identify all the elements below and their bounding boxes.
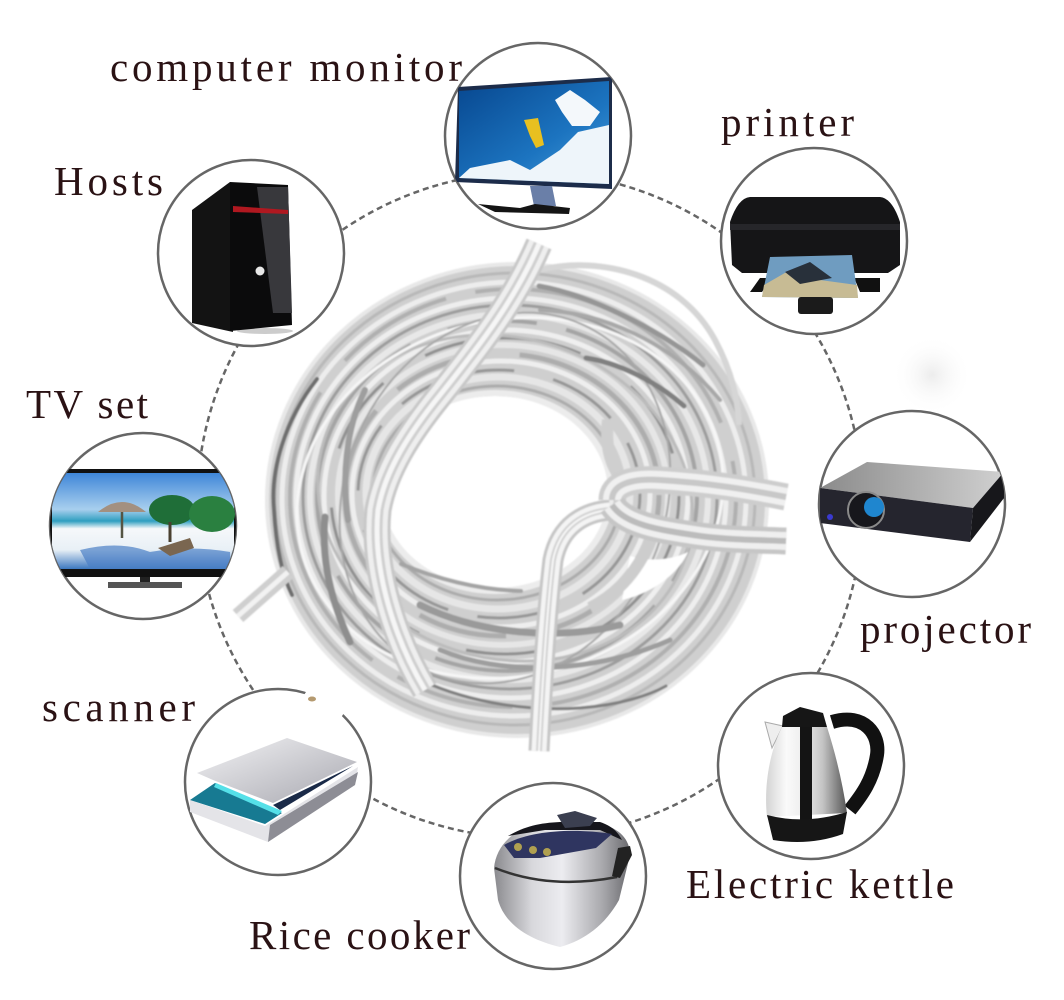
central cable coil — [238, 244, 786, 751]
device: scanner — [185, 689, 371, 875]
coil windings — [258, 259, 767, 737]
vertical tail ribbon — [539, 510, 610, 751]
left tail ribbon — [238, 572, 288, 616]
device: electric kettle — [718, 673, 904, 859]
strand under knot — [590, 527, 655, 608]
dashed connecting ring — [197, 172, 863, 838]
circle gap and speck — [306, 692, 342, 716]
top crossing ribbon — [377, 244, 539, 690]
label: TV set: TV set — [26, 381, 149, 427]
lower right pocket — [622, 552, 688, 600]
coil base band — [266, 263, 768, 737]
device: projector — [819, 411, 1005, 597]
dark reflections on coil — [273, 286, 720, 709]
right knot — [612, 480, 786, 541]
label: computer monitor: computer monitor — [110, 44, 462, 90]
thin outer top strand — [540, 265, 739, 425]
label: Rice cooker: Rice cooker — [249, 912, 470, 958]
label: printer: printer — [721, 99, 854, 145]
label: projector: projector — [860, 606, 1031, 652]
label: Hosts: Hosts — [54, 158, 163, 204]
inner right loop strand — [607, 420, 622, 480]
device: TV set — [50, 433, 236, 619]
label: Electric kettle: Electric kettle — [686, 861, 954, 907]
device: rice cooker — [460, 783, 646, 969]
label: scanner: scanner — [42, 684, 195, 730]
device: computer monitor — [445, 43, 631, 229]
device: printer — [721, 148, 907, 334]
device: hosts — [158, 160, 344, 346]
projector glow smudge — [892, 335, 972, 415]
